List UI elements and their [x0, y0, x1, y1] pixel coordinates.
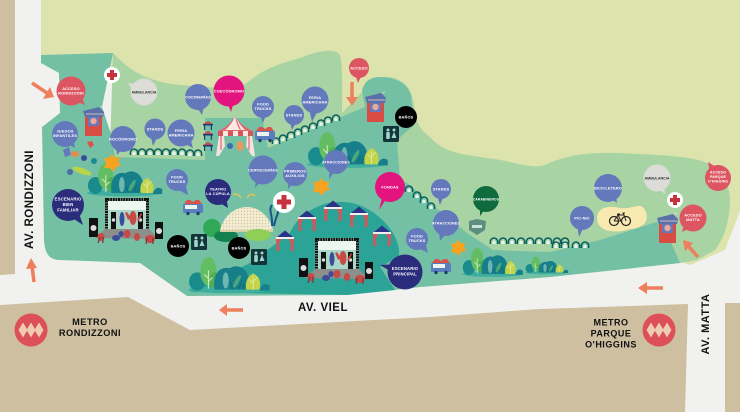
bubble: acceso Matta — [680, 204, 706, 232]
bubble: primeros auxilios: AUXILIOS — [285, 173, 305, 178]
block: right city block — [725, 303, 740, 412]
bubble: fondas — [375, 172, 405, 210]
block: left city block — [0, 0, 15, 275]
bubble: escenario principal — [380, 254, 422, 290]
bubble: teatro la cupula: TEATRO — [210, 186, 226, 192]
first aid: centre — [273, 191, 295, 213]
bubble: cervecerias: CERVECERÍAS — [248, 168, 278, 172]
restroom sign: south — [251, 249, 267, 265]
bubble: teatro la cupula: LA CÚPULA — [206, 191, 230, 196]
bubble: food trucks east: TRUCKS — [408, 238, 426, 243]
circus tent — [216, 116, 255, 156]
bubble: juegos infantiles: INFANTILES — [53, 133, 77, 138]
bubble: feria americana north: AMERICANA — [302, 100, 328, 104]
bubble: banos north: BAÑOS — [399, 114, 414, 120]
arrows: entrances — [26, 82, 698, 316]
metro: Parque O'Higgins — [585, 314, 676, 350]
first aid: Matta — [667, 192, 683, 208]
stars — [104, 154, 466, 256]
bubble: cuecodromo — [214, 76, 244, 112]
metro: Rondizzoni: METRO — [72, 317, 108, 327]
bubble: banos north — [395, 106, 417, 128]
restroom sign: south-west — [191, 234, 207, 250]
bubble: food trucks north: FOOD — [257, 102, 269, 106]
metro: Parque O'Higgins: PARQUE — [591, 328, 631, 338]
police shield — [469, 219, 486, 235]
bubble: cocinerias: COCINERÍAS — [185, 94, 211, 100]
road label: Av. Rondizzoni: AV. RONDIZZONI — [24, 150, 36, 249]
bubble: stands east: STANDS — [433, 186, 450, 192]
food truck: east — [431, 259, 451, 274]
bubble: food trucks east — [406, 228, 428, 253]
park: main stage hill — [190, 202, 399, 295]
bubble: food trucks west: TRUCKS — [168, 179, 186, 184]
bubble: primeros auxilios — [283, 162, 307, 189]
block: upper meadow — [41, 0, 740, 265]
bubble: escenario bien familiar: FAMILIAR — [57, 208, 79, 212]
bubble: stands west: STANDS — [147, 126, 164, 132]
bubble: banos south-west — [167, 235, 189, 257]
bubble: banos south — [228, 237, 250, 259]
food truck: north — [255, 127, 275, 142]
bubble: food trucks west — [166, 169, 188, 195]
family stage — [89, 198, 163, 244]
metro: Rondizzoni — [14, 314, 121, 346]
bubble: acceso north: ACCESO — [350, 66, 368, 70]
block: lower city block — [0, 297, 688, 412]
bubble: teatro la cupula — [205, 179, 231, 208]
bubble: acceso north — [349, 58, 369, 83]
bubble: acceso Rondizzoni: ACCESO — [62, 86, 80, 91]
main stage tents — [276, 200, 391, 251]
first aid: Rondizzoni — [104, 67, 120, 83]
bubble: pic-nic: PIC-NIC — [574, 216, 590, 220]
bubble: stands north — [284, 105, 304, 130]
bubble: bosque: ROCÓDROMO — [109, 136, 137, 142]
bubble: atracciones east — [432, 210, 460, 241]
bubble: pic-nic — [570, 206, 594, 237]
bubble: stands west — [144, 118, 166, 146]
bubble: carabineros: CARABINEROS — [473, 198, 500, 202]
bubble: escenario bien familiar: ESCENARIO — [55, 196, 82, 202]
stands: row diagonal — [405, 186, 435, 209]
bubble: escenario bien familiar — [52, 189, 84, 225]
stands: row centre — [272, 115, 340, 144]
food truck: west — [183, 200, 203, 215]
bubble: juegos infantiles: JUEGOS — [56, 128, 74, 134]
bubble: juegos infantiles — [52, 121, 78, 148]
bubble: acceso Rondizzoni: RONDIZZONI — [58, 90, 84, 96]
bubble: feria americana west: FERIA — [175, 128, 187, 133]
bubble: ambulancia east: AMBULANCIA — [644, 176, 670, 180]
booth: north — [365, 92, 386, 122]
bubble: banos south-west: BAÑOS — [171, 244, 186, 248]
bubble: ambulancia west: AMBULANCIA — [132, 90, 157, 94]
bubble: atracciones centre: ATRACCIONES — [322, 160, 350, 164]
park: teal area — [41, 53, 680, 296]
bubble: feria americana west: AMERICANA — [168, 132, 194, 138]
bubble: primeros auxilios: PRIMEROS — [284, 168, 306, 174]
bicycle blob — [597, 206, 647, 231]
stands: row east — [490, 238, 589, 248]
bubble: escenario principal: PRINCIPAL — [393, 272, 417, 276]
bubble: acceso Matta: ACCESO — [684, 212, 702, 218]
park: light green area — [110, 51, 730, 295]
bubble: feria americana north: FERIA — [309, 95, 321, 100]
road label: Av. Viel: AV. VIEL — [298, 302, 348, 314]
trees: south garden — [188, 257, 270, 293]
metro: Parque O'Higgins: METRO — [594, 318, 628, 328]
main stage — [299, 238, 373, 284]
bubble: escenario principal: ESCENARIO — [392, 266, 419, 271]
trees: west garden — [87, 163, 162, 196]
bubble: acceso Parque O'Higgins: O'HIGGINS — [708, 180, 729, 184]
bubble: cervecerias — [248, 156, 278, 188]
bubble: cocinerias — [185, 84, 211, 115]
bubble: fondas: FONDAS — [381, 184, 399, 190]
trees: north garden — [307, 132, 388, 168]
road label: Av. Matta: AV. MATTA — [700, 294, 712, 354]
restroom sign: north — [383, 126, 399, 142]
bubble: stands north: STANDS — [286, 112, 303, 118]
metro: Parque O'Higgins: O'HIGGINS — [585, 340, 637, 350]
bubble: acceso Matta: MATTA — [686, 217, 700, 222]
bubble: feria americana north — [302, 86, 328, 122]
bubble: bicicletero — [594, 174, 622, 203]
metro: Rondizzoni: RONDIZZONI — [59, 328, 121, 338]
bubble: ambulancia east — [644, 164, 670, 194]
dome: La Cupula — [203, 194, 279, 242]
bubble: cuecodromo: CUECÓDROMO — [214, 88, 244, 94]
bubble: stands east — [431, 179, 451, 205]
bubble: escenario bien familiar: BIEN — [63, 202, 73, 207]
playground — [63, 141, 97, 177]
bubble: food trucks north: TRUCKS — [254, 106, 272, 111]
bubble: carabineros — [473, 186, 500, 216]
bubble: acceso Parque O'Higgins: PARQUE — [710, 175, 726, 179]
small tents beside circus — [203, 121, 213, 151]
bubble: food trucks west: FOOD — [171, 174, 183, 180]
bubble: acceso Parque O'Higgins — [705, 162, 731, 191]
bubble: atracciones centre — [322, 150, 350, 179]
bubble: bicicletero: BICICLETERO — [594, 186, 622, 190]
bubble: bosque — [109, 126, 137, 155]
bubble: acceso Parque O'Higgins: ACCESO — [710, 170, 726, 174]
booth: Matta — [657, 213, 678, 243]
booth: Rondizzoni — [83, 106, 104, 136]
stands: row west — [130, 149, 202, 156]
bubble: ambulancia west — [128, 78, 158, 106]
bubble: feria americana west — [168, 120, 194, 148]
bubble: food trucks east: FOOD — [411, 234, 423, 238]
bubble: atracciones east: ATRACCIONES — [432, 222, 460, 226]
bubble: banos south: BAÑOS — [232, 246, 247, 250]
bubble: food trucks north — [252, 96, 274, 123]
trees: far east garden — [525, 256, 568, 274]
bubble: acceso Rondizzoni — [56, 76, 86, 106]
trees: east garden — [462, 248, 523, 277]
